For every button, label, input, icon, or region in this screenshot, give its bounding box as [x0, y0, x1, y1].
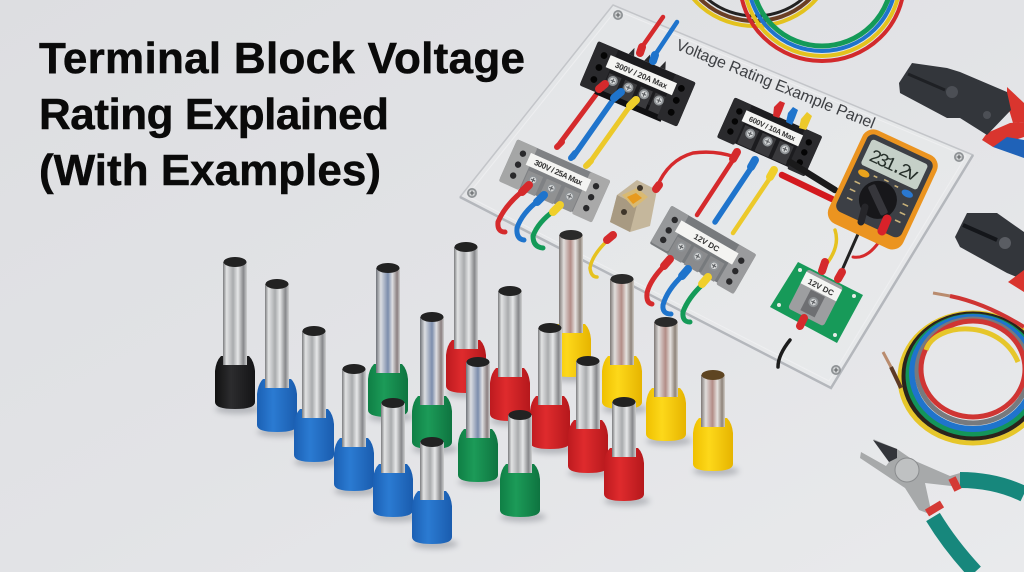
wire coil, lower right [883, 293, 1024, 443]
title: (With Examples) [39, 146, 381, 195]
multimeter: 231.2v [865, 145, 922, 187]
terminal block: 300V / 20A Max (black) [579, 34, 699, 129]
ferrule: blue 1 [257, 279, 303, 437]
ferrule: yellow 3 [646, 317, 692, 446]
ferrule: black [215, 257, 261, 414]
wire ends [933, 293, 950, 296]
ferrule: green 1 [368, 263, 414, 422]
top wire coil: red, yellow, blue, green [740, 0, 904, 61]
label [606, 55, 677, 95]
rotary dial [853, 175, 903, 225]
ferrule: yellow 2 [602, 274, 648, 414]
panel: acrylic voltage rating example panel [460, 5, 973, 388]
ferrule: red 3 [530, 323, 576, 454]
title: Terminal Block Voltage [39, 34, 525, 83]
label [526, 153, 591, 192]
ferrule: green 4 [500, 410, 546, 522]
ferrule: red 4 [568, 356, 614, 478]
terminal block: 300V / 20A Max (black): 300V / 20A Max [614, 61, 669, 91]
tool: crimping pliers, right [955, 213, 1024, 292]
wires between blocks [498, 17, 885, 367]
terminal block: 300V / 25A Max (gray) [499, 139, 611, 223]
ferrule: red 5 [604, 397, 650, 506]
LCD display [860, 139, 928, 190]
ferrule: yellow 4 [693, 370, 739, 476]
top wire stubs on 600V block [773, 101, 812, 130]
ferrule: green 2 [412, 312, 458, 454]
ferrule: red 2 [490, 286, 536, 426]
tool: crimping pliers, top right [899, 63, 1024, 158]
top wire coil: yellow and brown [679, 0, 831, 26]
terminal block: 600V / 10A Max (black): 600V / 10A Max [747, 114, 798, 143]
DIN terminal block (tan) [610, 180, 657, 232]
ferrule: blue 3 [334, 364, 380, 496]
terminal block: 12V DC (gray) [649, 205, 756, 294]
label [675, 220, 739, 265]
label: 12V DC [806, 277, 836, 298]
label [742, 110, 803, 146]
blue button [900, 188, 914, 199]
terminal block: 12V DC (gray): 12V DC [692, 232, 721, 254]
green PCB with 12V DC block [770, 262, 863, 343]
multimeter [824, 125, 942, 253]
terminal block: 300V / 25A Max (gray): 300V / 25A Max [533, 158, 584, 188]
panel screws [467, 10, 964, 375]
crimped ferrules on wires [522, 47, 774, 284]
panel heading: Voltage Rating Example Panel [674, 37, 877, 132]
ferrule: red 1 [446, 242, 492, 398]
terminal block: 600V / 10A Max (black) [717, 97, 822, 177]
ferrule: blue 5 [412, 437, 458, 549]
title [39, 34, 525, 195]
test leads into multimeter [782, 162, 835, 199]
ferrule: green 3 [458, 357, 504, 487]
yellow button [857, 168, 871, 179]
title: Rating Explained [39, 90, 389, 139]
ferrule: yellow 1 [551, 230, 597, 382]
meter probes [861, 207, 887, 231]
ferrule: blue 2 [294, 326, 340, 467]
ferrule: blue 4 [373, 398, 419, 522]
tool: diagonal cutters [860, 439, 1024, 572]
